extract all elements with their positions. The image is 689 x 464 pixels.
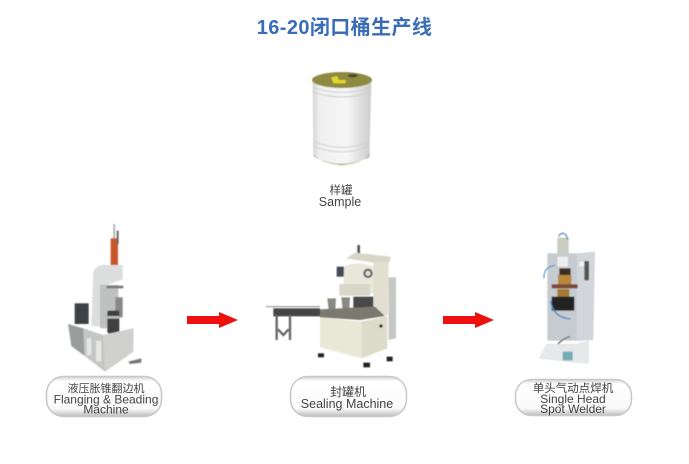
pill label: sealing <box>290 376 406 416</box>
sample label: 样罐 <box>330 183 353 197</box>
pill label: sealing: 封罐机 <box>330 385 366 399</box>
pill label: spot welder <box>516 380 632 416</box>
sample label <box>319 183 361 209</box>
machine: sealing <box>266 245 396 367</box>
pill label: flanging and beading: Machine <box>83 402 129 416</box>
pill label: flanging and beading: Flanging & Beading <box>54 392 158 406</box>
pill label: sealing: Sealing Machine <box>301 397 393 411</box>
title: 16-20闭口桶生产线 <box>257 16 432 39</box>
pill label: flanging and beading: 液压胀锥翻边机 <box>68 381 144 395</box>
arrow: second step <box>443 312 494 328</box>
pill label: flanging and beading <box>46 376 162 416</box>
sample label: Sample <box>319 195 361 209</box>
arrow: first step <box>187 312 238 328</box>
pill label: spot welder: Single Head <box>540 392 606 406</box>
pill label: spot welder: Spot Welder <box>540 402 606 416</box>
pill label: spot welder: 单头气动点焊机 <box>533 381 614 395</box>
machine: flanging and beading <box>68 224 141 372</box>
icon: sample drum <box>312 72 372 165</box>
machine: spot welder <box>539 233 595 363</box>
